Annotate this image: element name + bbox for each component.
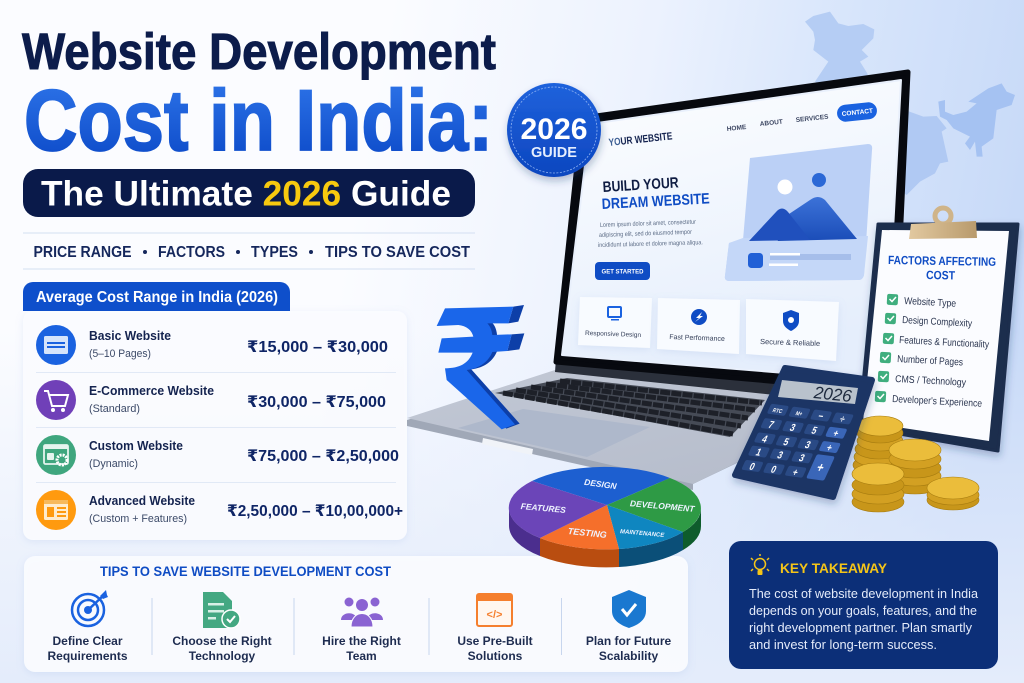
calculator display: 2026: [812, 383, 853, 406]
takeaway text: [749, 587, 978, 652]
calculator keys: M+: [794, 411, 803, 418]
screen frame: [556, 72, 908, 392]
clipboard checklist: Number of Pages: [897, 354, 963, 368]
takeaway text: depends on your goals, features, and the: [749, 604, 977, 618]
year badge: 2026: [520, 113, 588, 146]
hero headline: [601, 174, 710, 213]
laptop base deck: [407, 370, 880, 490]
clipboard heading: [888, 253, 996, 283]
lower bezel: [555, 358, 893, 406]
icon: light bulb: [751, 554, 769, 575]
tip: use pre-built solutions: </>: [487, 609, 502, 621]
pie sides: [509, 508, 701, 567]
screen: [562, 80, 901, 381]
pie labels: TESTING: [567, 526, 607, 540]
laptop: [407, 72, 908, 490]
topics strip: TIPS TO SAVE COST: [325, 244, 471, 261]
calculator keys: −: [816, 411, 826, 423]
tips heading: TIPS TO SAVE WEBSITE DEVELOPMENT COST: [100, 564, 392, 579]
clipboard heading: COST: [926, 268, 956, 283]
site navigation: HOME: [726, 124, 747, 133]
cost table card: [23, 311, 407, 540]
site navigation: ABOUT: [759, 119, 783, 128]
hero copy: Lorem ipsum dolor sit amet, consectetur: [600, 219, 696, 229]
calculator keys: +: [814, 459, 827, 475]
year badge: [507, 83, 601, 177]
hero headline: DREAM WEBSITE: [601, 190, 710, 213]
calculator keys: 1: [754, 447, 764, 459]
cost table tab: Average Cost Range in India (2026): [36, 289, 278, 306]
coin stack back left: [853, 416, 903, 475]
slice: testing: [540, 505, 619, 549]
feature card: responsive design: [578, 297, 652, 348]
calculator: [735, 368, 872, 497]
hero image: [725, 144, 872, 281]
takeaway heading: KEY TAKEAWAY: [780, 560, 888, 576]
calculator keys: +: [831, 428, 841, 440]
panel: key takeaway: [729, 541, 998, 669]
row: advanced website: [36, 490, 403, 530]
clipboard checklist: Features & Functionality: [899, 335, 989, 351]
pie labels: DEVELOPMENT: [630, 498, 696, 514]
clipboard clip: [909, 208, 977, 239]
row: basic website: Basic Website: [89, 329, 171, 343]
map of India: [805, 12, 1015, 195]
takeaway text: The cost of website development in India: [749, 587, 978, 601]
clipboard board: [859, 224, 1018, 451]
row: advanced website: ₹2,50,000 – ₹10,00,000+: [227, 503, 403, 520]
pie labels: FEATURES: [520, 501, 567, 515]
row: custom website: Custom Website: [89, 439, 183, 453]
title line 1: Website Development: [22, 23, 496, 80]
calculator keys: 4: [760, 434, 770, 446]
pie labels: DESIGN: [584, 477, 618, 491]
panel: tips to save cost: [24, 556, 688, 672]
tip: hire the right team: [322, 598, 401, 663]
tip: hire the right team: Hire the Right: [322, 634, 401, 648]
slice: features: [509, 481, 607, 538]
hero copy: adipiscing elit, sed do eiusmod tempor: [599, 229, 692, 239]
tip: choose the right technology: Choose the Right: [172, 634, 272, 648]
row: advanced website: (Custom + Features): [89, 513, 187, 525]
clipboard checklist: Developer's Experience: [892, 394, 983, 410]
tip: choose the right technology: [172, 592, 272, 663]
coins: [852, 416, 979, 512]
coin stack small: [927, 477, 979, 510]
calculator keys: [740, 404, 854, 483]
row: e-commerce website: (Standard): [89, 403, 140, 415]
row: advanced website: Advanced Website: [89, 494, 195, 508]
calculator keys: 3: [788, 422, 797, 434]
row: custom website: [36, 435, 399, 475]
pie labels: MAINTENANCE: [620, 529, 665, 539]
topics strip: [23, 233, 475, 269]
calculator keys: 5: [809, 425, 819, 437]
row: custom website: ₹75,000 – ₹2,50,000: [247, 448, 399, 465]
get started button: GET STARTED: [602, 270, 644, 276]
tip: plan for future scalability: [586, 590, 671, 663]
slice: maintenance: [607, 505, 683, 549]
site navigation: [726, 101, 878, 133]
calculator keys: +: [824, 442, 834, 454]
slice: design: [532, 467, 670, 505]
cost table tab: [23, 282, 290, 311]
tip: use pre-built solutions: [457, 594, 533, 663]
calculator keys: 7: [766, 419, 776, 431]
tip: plan for future scalability: Scalability: [599, 649, 658, 663]
hero headline: BUILD YOUR: [602, 174, 679, 196]
keyboard: [495, 378, 765, 437]
title line 2: Cost in India:: [24, 73, 493, 169]
row: custom website: (Dynamic): [89, 458, 138, 470]
pie labels: [520, 477, 696, 540]
clipboard: [859, 208, 1018, 451]
hero copy: incididunt ut labore et dolore magna aliqua.: [598, 239, 703, 249]
tip: define clear requirements: [47, 590, 128, 663]
topics strip: TYPES: [251, 244, 298, 261]
tip: plan for future scalability: Plan for Future: [586, 634, 671, 648]
site navigation: CONTACT: [841, 108, 873, 118]
calculator keys: 3: [803, 439, 812, 451]
feature card: fast performance: Fast Performance: [669, 334, 725, 343]
calculator keys: ÷: [837, 414, 848, 426]
calculator keys: 5: [781, 437, 791, 449]
topics strip: PRICE RANGE: [34, 244, 132, 261]
calculator keys: +: [790, 467, 800, 479]
trackpad: [458, 409, 650, 457]
calculator keys: 3: [797, 453, 806, 465]
clipboard heading: FACTORS AFFECTING: [888, 253, 996, 269]
takeaway text: and invest for long-term success.: [749, 638, 937, 652]
topics strip: FACTORS: [158, 244, 225, 261]
clipboard paper: [863, 230, 1009, 441]
row: e-commerce website: [36, 380, 386, 420]
clipboard checklist: CMS / Technology: [895, 374, 966, 389]
tip: choose the right technology: Technology: [189, 649, 256, 663]
get started button: [595, 262, 650, 280]
row: basic website: (5–10 Pages): [89, 348, 151, 360]
panel: average cost range: [23, 282, 407, 540]
site logo: YOUR WEBSITE: [608, 130, 673, 149]
tip: define clear requirements: Define Clear: [52, 634, 123, 648]
calculator keys: 0: [769, 464, 778, 476]
takeaway text: right development partner. Plan smartly: [749, 621, 973, 635]
tip: hire the right team: Team: [346, 649, 377, 663]
feature card: secure and reliable: Secure & Reliable: [760, 337, 820, 348]
coin stack back right: [889, 439, 941, 494]
feature card: secure and reliable: [746, 299, 839, 361]
site navigation: SERVICES: [795, 114, 829, 124]
calculator keys: 0: [747, 461, 757, 473]
feature card: fast performance: [657, 298, 740, 354]
calculator keys: 3: [775, 450, 785, 462]
clipboard checklist: [875, 294, 989, 410]
icon: 3D rupee symbol: [437, 305, 524, 429]
clipboard checklist: Design Complexity: [902, 315, 972, 330]
tip: use pre-built solutions: Solutions: [468, 649, 523, 663]
coin stack front: [852, 463, 904, 512]
row: basic website: ₹15,000 – ₹30,000: [247, 339, 388, 356]
subtitle pill: The Ultimate 2026 Guide: [41, 174, 451, 214]
tip: use pre-built solutions: Use Pre-Built: [457, 634, 533, 648]
year badge: GUIDE: [531, 145, 577, 161]
tip: define clear requirements: Requirements: [47, 649, 128, 663]
feature card: responsive design: Responsive Design: [585, 330, 642, 339]
row: basic website: [36, 325, 388, 365]
row: e-commerce website: E-Commerce Website: [89, 384, 214, 398]
clipboard checklist: Website Type: [904, 296, 957, 310]
slice: development: [607, 478, 701, 532]
row: e-commerce website: ₹30,000 – ₹75,000: [247, 394, 386, 411]
hero copy: [598, 219, 703, 249]
pie chart: [509, 467, 701, 567]
calculator keys: RTC: [771, 408, 783, 415]
